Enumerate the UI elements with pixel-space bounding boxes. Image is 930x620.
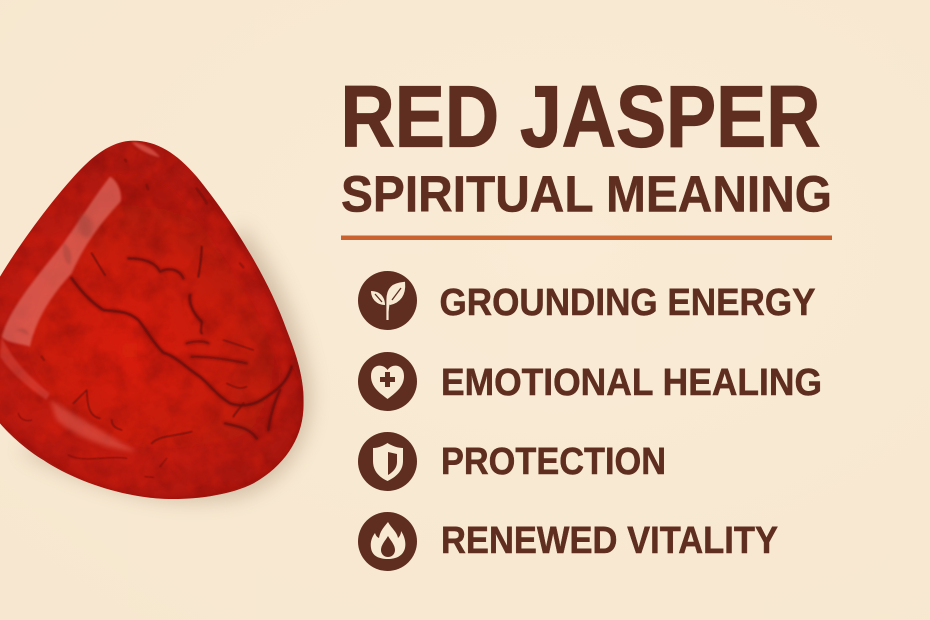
title: RED JASPER (340, 68, 820, 166)
list item: protection (358, 432, 666, 491)
subtitle: SPIRITUAL MEANING (341, 166, 832, 222)
label: grounding energy: GROUNDING ENERGY (440, 282, 816, 324)
icon: sprout (358, 271, 417, 330)
icon: shield (358, 432, 417, 491)
label: renewed vitality: RENEWED VITALITY (441, 520, 778, 562)
soft halo around veins (72, 258, 292, 438)
stone shadow (20, 225, 311, 500)
icon: heart with cross (358, 352, 417, 411)
label: protection: PROTECTION (441, 441, 666, 483)
list item: renewed vitality (358, 512, 778, 571)
icon: flame with drop (358, 512, 417, 571)
illustration: polished red jasper stone (0, 130, 317, 513)
stone body (0, 140, 304, 499)
label: emotional healing: EMOTIONAL HEALING (441, 362, 822, 404)
list item: grounding energy (358, 271, 816, 330)
dark veins (18, 159, 292, 477)
glossy highlights (2, 177, 121, 347)
orange divider rule (341, 236, 832, 240)
list item: emotional healing (358, 352, 822, 411)
